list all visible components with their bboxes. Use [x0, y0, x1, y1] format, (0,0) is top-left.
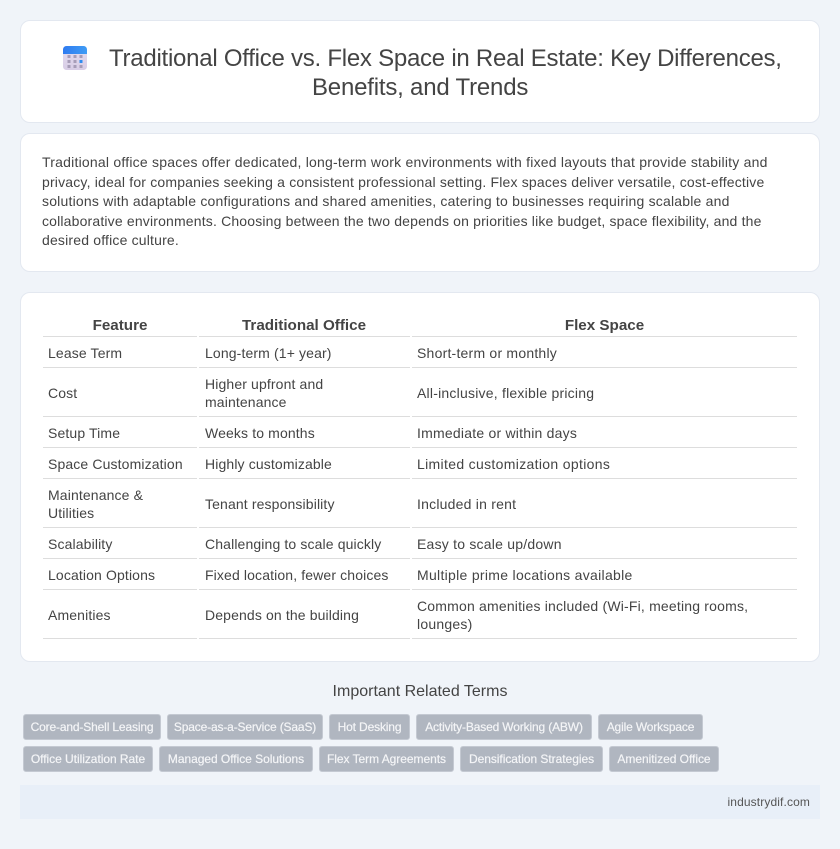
row: lease term: Short-term or monthly	[417, 345, 557, 361]
title	[109, 45, 782, 101]
row: scalability: Easy to scale up/down	[417, 536, 562, 552]
intro text	[42, 154, 768, 248]
intro text: solutions with adaptable configurations and shared amenities, catering to businesses requiring scalable and	[42, 193, 730, 209]
row: scalability	[48, 536, 562, 552]
row: cost: maintenance	[205, 394, 287, 410]
tags row 1: Hot Desking	[338, 720, 401, 734]
row: maintenance and utilities: Included in rent	[417, 496, 516, 512]
row: space customization	[48, 456, 610, 472]
row: location options: Fixed location, fewer choices	[205, 567, 389, 583]
intro text: privacy, ideal for companies seeking a consistent professional setting. Flex spaces deliver versatile, cost-effective	[42, 174, 764, 190]
footer: industrydif.com	[728, 795, 810, 809]
tags row 2	[23, 746, 719, 772]
row: maintenance and utilities	[48, 487, 516, 521]
table header: Feature	[93, 317, 147, 334]
row: scalability: Scalability	[48, 536, 112, 552]
panel: comparison table	[20, 292, 820, 662]
panel: intro	[20, 133, 820, 272]
row: setup time: Setup Time	[48, 425, 120, 441]
icon: calendar	[63, 46, 87, 70]
row: location options	[48, 567, 633, 583]
row: amenities: lounges)	[417, 616, 472, 632]
row: setup time	[48, 425, 577, 441]
row: amenities: Depends on the building	[205, 607, 359, 623]
row: location options: Location Options	[48, 567, 155, 583]
row: setup time: Weeks to months	[205, 425, 315, 441]
intro text: collaborative environments. Choosing between the two depends on priorities like budget, space flexibility, and the	[42, 212, 762, 228]
row: maintenance and utilities: Maintenance &	[48, 487, 143, 503]
table header: Flex Space	[565, 317, 644, 334]
tags row 1: Core-and-Shell Leasing	[31, 720, 153, 734]
row rules	[43, 336, 797, 639]
row: amenities: Common amenities included (Wi-Fi, meeting rooms,	[417, 598, 748, 614]
row: lease term	[48, 345, 557, 361]
tags row 2: Office Utilization Rate	[31, 752, 145, 766]
row: location options: Multiple prime locations available	[417, 567, 633, 583]
row: cost	[48, 376, 594, 410]
intro text: Traditional office spaces offer dedicated, long-term work environments with fixed layouts that provide stability and	[42, 154, 768, 170]
tags row 1: Space-as-a-Service (SaaS)	[174, 720, 316, 734]
tags row 1: Agile Workspace	[607, 720, 694, 734]
row: maintenance and utilities: Tenant responsibility	[205, 496, 335, 512]
row: maintenance and utilities: Utilities	[48, 505, 94, 521]
row: cost: Higher upfront and	[205, 376, 323, 392]
tags row 1: Activity-Based Working (ABW)	[425, 720, 583, 734]
panel: title card	[20, 20, 820, 123]
row: lease term: Long-term (1+ year)	[205, 345, 332, 361]
row: amenities: Amenities	[48, 607, 111, 623]
tags row 1	[23, 714, 703, 740]
title: Traditional Office vs. Flex Space in Real Estate: Key Differences,	[109, 45, 782, 72]
row: setup time: Immediate or within days	[417, 425, 577, 441]
row: space customization: Limited customization options	[417, 456, 610, 472]
row: scalability: Challenging to scale quickly	[205, 536, 381, 552]
table header: Traditional Office	[242, 317, 366, 334]
tags row 2: Flex Term Agreements	[327, 752, 446, 766]
tags row 2: Managed Office Solutions	[168, 752, 304, 766]
row: space customization: Space Customization	[48, 456, 183, 472]
row: amenities	[48, 598, 748, 632]
title: Benefits, and Trends	[312, 74, 528, 101]
row: lease term: Lease Term	[48, 345, 122, 361]
row: cost: Cost	[48, 385, 77, 401]
table header	[93, 317, 644, 334]
footer	[20, 785, 820, 819]
intro text: desired office culture.	[42, 232, 179, 248]
row: cost: All-inclusive, flexible pricing	[417, 385, 594, 401]
tags row 2: Amenitized Office	[617, 752, 711, 766]
heading: important related terms: Important Related Terms	[333, 683, 507, 700]
row: space customization: Highly customizable	[205, 456, 332, 472]
tags row 2: Densification Strategies	[469, 752, 594, 766]
